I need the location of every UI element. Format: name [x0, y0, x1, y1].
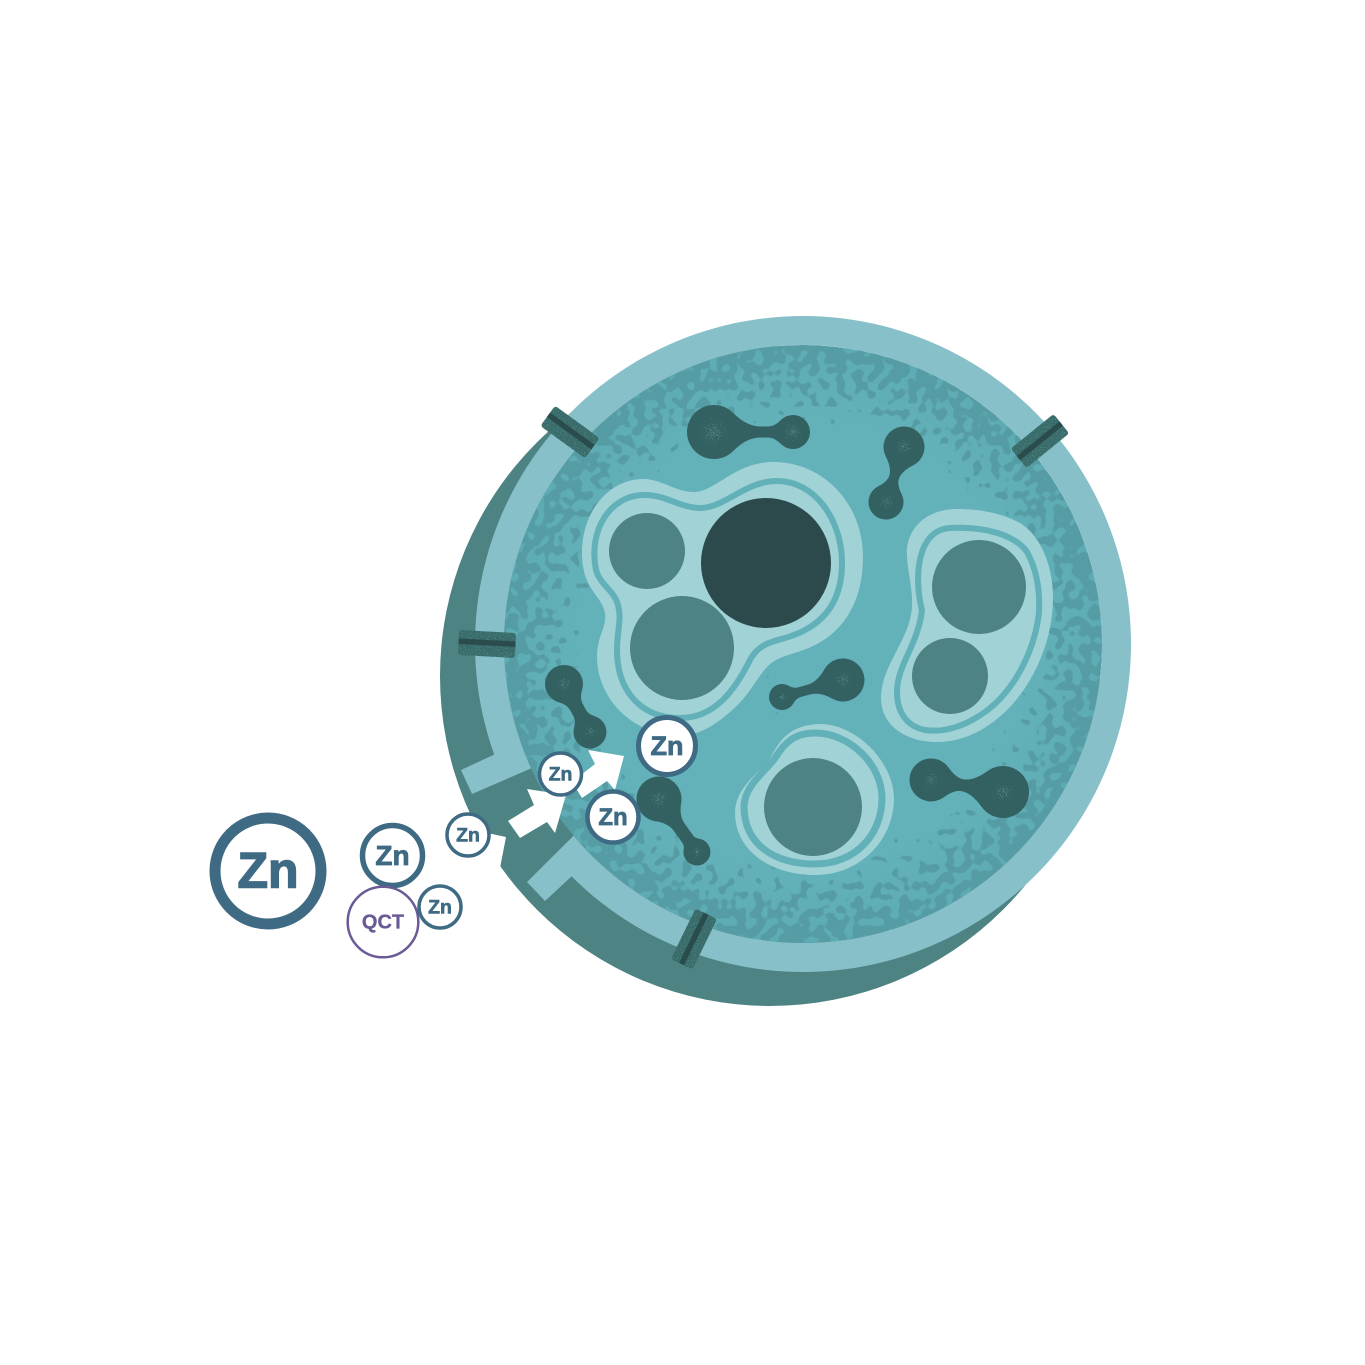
zinc ion: between arrows	[540, 753, 582, 795]
mitochondrion: lower right	[906, 751, 1033, 822]
mitochondrion: left	[538, 658, 615, 756]
QCT ionophore: QCT	[362, 912, 404, 934]
shell notch	[478, 831, 506, 868]
zinc ion: at membrane: Zn	[456, 824, 480, 846]
mitochondrion: upper right	[861, 421, 930, 525]
zinc ion: large	[215, 818, 321, 924]
mitochondrion: top	[687, 405, 810, 459]
mitochondrion: centre	[764, 654, 869, 721]
zinc ion: above QCT: Zn	[375, 840, 410, 871]
zinc ion: above QCT	[362, 826, 422, 886]
membrane channel: left	[458, 630, 516, 658]
QCT ionophore	[348, 887, 418, 957]
organelle: bottom vesicle with one nucleus	[735, 724, 894, 875]
zinc ion: inside cell, upper	[638, 718, 696, 774]
zinc ion: beside QCT: Zn	[428, 896, 452, 918]
membrane channel: upper left	[540, 406, 600, 458]
cytoplasm	[504, 345, 1102, 943]
organelle: right vesicle with two nuclei	[881, 509, 1053, 742]
organelle: large vesicle with three nuclei	[582, 462, 863, 736]
zinc ion: inside cell, lower	[588, 792, 638, 842]
arrow: into cell, second	[572, 750, 624, 798]
mitochondrion: lower left	[628, 768, 723, 876]
illustration: zinc uptake into a cell	[210, 316, 1131, 1006]
membrane channel: bottom	[671, 909, 717, 969]
zinc ion: at membrane	[447, 814, 489, 856]
zinc ion: beside QCT	[419, 886, 461, 928]
zinc ion: inside cell, upper: Zn	[650, 731, 684, 761]
cell membrane ring	[461, 316, 1131, 972]
cell shadow shell	[440, 346, 1100, 1006]
zinc ion: between arrows: Zn	[549, 764, 572, 786]
membrane channel: upper right	[1011, 414, 1069, 468]
zinc ion: inside cell, lower: Zn	[598, 804, 628, 831]
arrow: into cell, first	[508, 789, 566, 838]
zinc ion: large: Zn	[237, 842, 299, 898]
